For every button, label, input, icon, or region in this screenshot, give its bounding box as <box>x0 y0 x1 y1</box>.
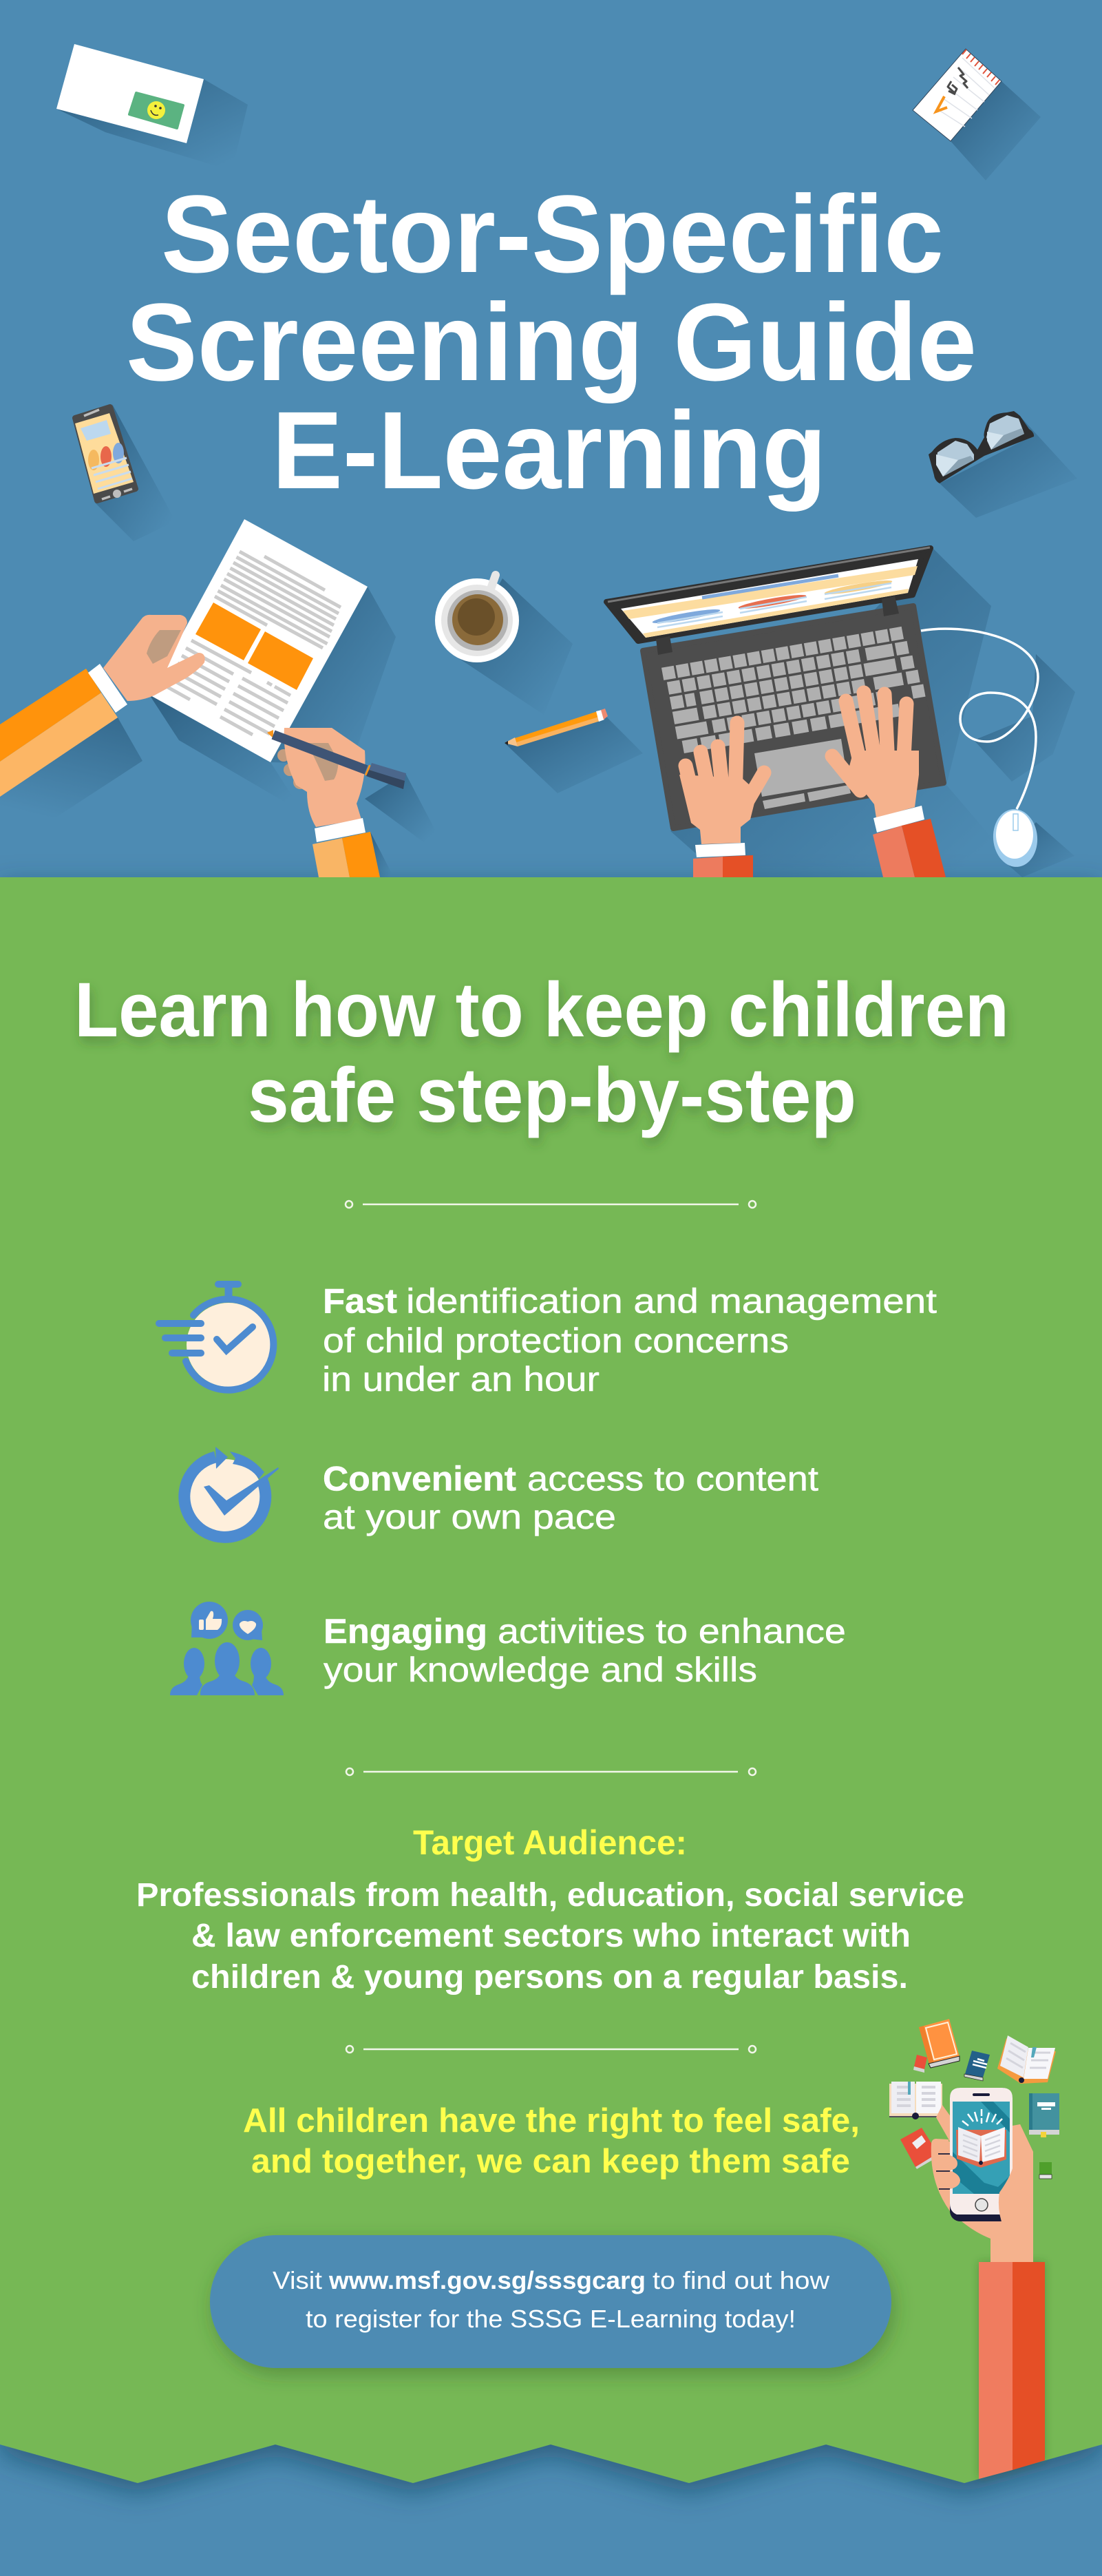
left arm sleeve shadow <box>0 718 142 854</box>
text: audience description: children & young persons on a regular basis. <box>191 1959 908 1996</box>
divider 1 <box>346 1201 756 1208</box>
heading: learn how to keep children safe: safe step-by-step <box>248 1052 856 1138</box>
icon: circular arrow check <box>184 1447 279 1537</box>
call to action pill: www.msf.gov.sg/sssgcarg <box>328 2266 646 2294</box>
text: engaging: activities to enhance <box>498 1612 846 1651</box>
text: convenient: at your own pace <box>323 1498 616 1536</box>
phone screen <box>953 2102 1010 2194</box>
text: convenient: Convenient <box>323 1460 516 1498</box>
book: navy <box>964 2051 990 2081</box>
text: fast <box>322 1282 937 1399</box>
panel: desk background <box>0 0 1102 878</box>
callout: all children have the right: and together, we can keep them safe <box>251 2143 850 2180</box>
book: open left <box>889 2082 942 2119</box>
call to action pill: Visit <box>273 2266 322 2294</box>
illustration: document held in hand <box>0 519 396 854</box>
text: convenient: access to content <box>527 1460 818 1498</box>
icon: coffee cup <box>435 575 573 715</box>
icon: stopwatch <box>159 1284 273 1390</box>
text: audience description <box>136 1877 964 1996</box>
trackpad <box>754 739 848 797</box>
book: orange <box>919 2019 960 2068</box>
title: Screening Guide <box>126 280 977 404</box>
front hand and fingers <box>931 2124 1033 2262</box>
text: audience description: & law enforcement sectors who interact with <box>191 1918 911 1954</box>
icon: smartphone <box>75 404 176 541</box>
title <box>126 172 977 512</box>
text: engaging: your knowledge and skills <box>324 1651 757 1689</box>
call to action pill: to register for the SSSG E-Learning today! <box>306 2305 796 2333</box>
hand behind phone <box>931 2105 1033 2262</box>
title: Sector-Specific <box>161 172 944 295</box>
text: fast: Fast <box>323 1282 397 1321</box>
icon: envelope card <box>56 44 248 171</box>
heading: learn how to keep children safe: Learn how to keep children <box>74 967 1009 1053</box>
keyboard keys <box>663 631 927 748</box>
laptop base <box>643 606 944 828</box>
icon: pencil <box>505 709 643 793</box>
illustration: laptop with typing hands and mouse <box>606 547 1075 877</box>
book: red <box>900 2128 933 2169</box>
illustration: right hand with pen <box>267 728 435 877</box>
callout: all children have the right <box>243 2102 860 2180</box>
call to action pill <box>210 2235 891 2368</box>
text: audience description: Professionals from health, education, social service <box>136 1877 964 1914</box>
text: engaging <box>324 1612 846 1689</box>
heading: target audience: Target Audience: <box>413 1823 687 1862</box>
text: engaging: Engaging <box>324 1612 487 1651</box>
book: small red <box>913 2055 927 2073</box>
book: open top right <box>997 2035 1056 2084</box>
illustration: left arm holding document <box>0 615 205 797</box>
book: teal <box>1029 2093 1059 2137</box>
phone body <box>950 2088 1013 2221</box>
text: convenient <box>323 1460 818 1536</box>
illustration: hand holding phone with books <box>889 2019 1059 2479</box>
divider 2 <box>346 1768 756 1775</box>
panel: lower green section with zigzag edge and blue footer <box>0 877 1102 2576</box>
icon: spiral notepad <box>913 49 1041 180</box>
text: fast: of child protection concerns <box>323 1321 789 1360</box>
icon: people with reactions <box>170 1602 284 1695</box>
mouse cable <box>921 629 1038 809</box>
right typing hand <box>832 693 946 877</box>
phone speaker and home button <box>973 2093 990 2211</box>
left typing hand <box>679 723 764 877</box>
sleeve <box>979 2262 1045 2479</box>
text: fast: identification and management <box>406 1282 937 1321</box>
divider 3 <box>346 2046 756 2053</box>
text: fast: in under an hour <box>322 1360 600 1399</box>
icon: glasses <box>929 411 1077 518</box>
laptop lid <box>606 548 931 641</box>
callout: all children have the right: All children have the right to feel safe, <box>243 2102 860 2139</box>
mouse <box>990 807 1074 877</box>
call to action pill: to find out how <box>653 2266 830 2294</box>
laptop screen <box>621 559 918 638</box>
heading: learn how to keep children safe <box>74 967 1009 1138</box>
title: E-Learning <box>272 388 827 512</box>
book: small green <box>1039 2162 1052 2179</box>
